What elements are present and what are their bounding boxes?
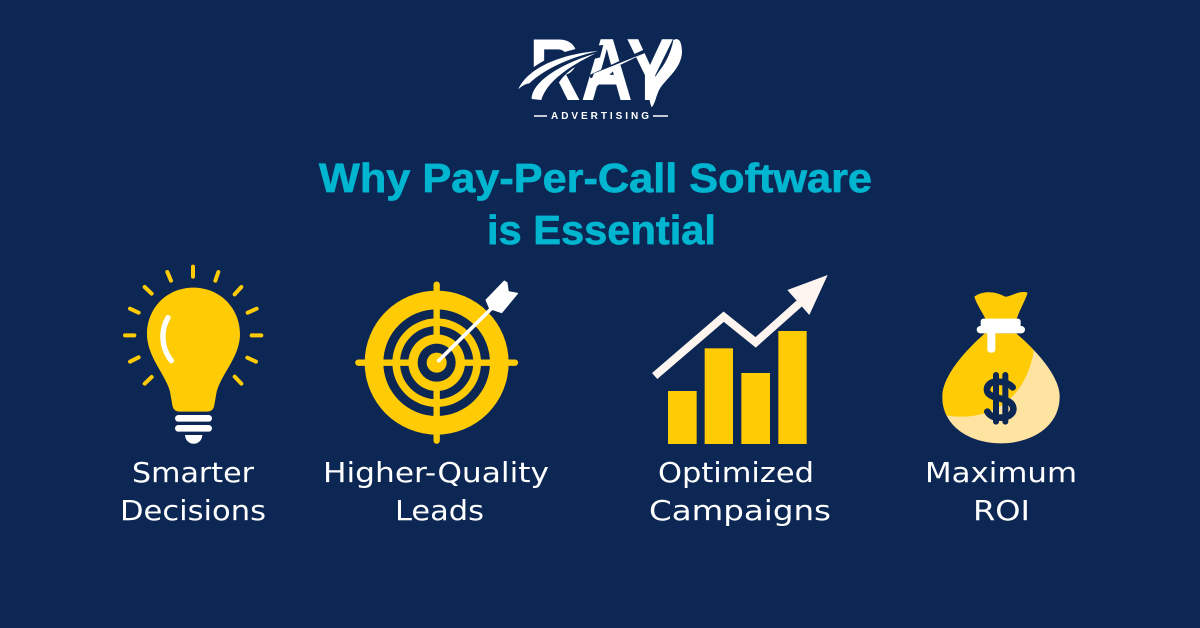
label: Higher-Quality Leads (323, 456, 549, 527)
label: Optimized Campaigns: Campaigns (649, 494, 831, 527)
label: Smarter Decisions: Decisions (120, 494, 266, 527)
label: Maximum ROI: ROI (973, 494, 1030, 527)
icon: target with arrow (358, 281, 518, 441)
icon: money bag (930, 292, 1060, 443)
title: is Essential (487, 207, 716, 253)
label: Smarter Decisions: Smarter (132, 456, 255, 489)
label: Optimized Campaigns: Optimized (658, 456, 814, 489)
icon: light bulb (125, 267, 261, 444)
label: Maximum ROI (925, 456, 1077, 527)
label: Maximum ROI: Maximum (925, 456, 1077, 489)
icon: growth bar chart with arrow (655, 275, 828, 444)
title (319, 155, 872, 253)
logo: Ray Advertising: RAY (529, 20, 674, 119)
label: Higher-Quality Leads: Leads (395, 494, 484, 527)
logo: Ray Advertising: ADVERTISING (551, 111, 649, 122)
label: Optimized Campaigns (649, 456, 831, 527)
label: Higher-Quality Leads: Higher-Quality (323, 456, 549, 489)
label: Smarter Decisions (120, 456, 266, 527)
title: Why Pay-Per-Call Software (319, 155, 872, 201)
